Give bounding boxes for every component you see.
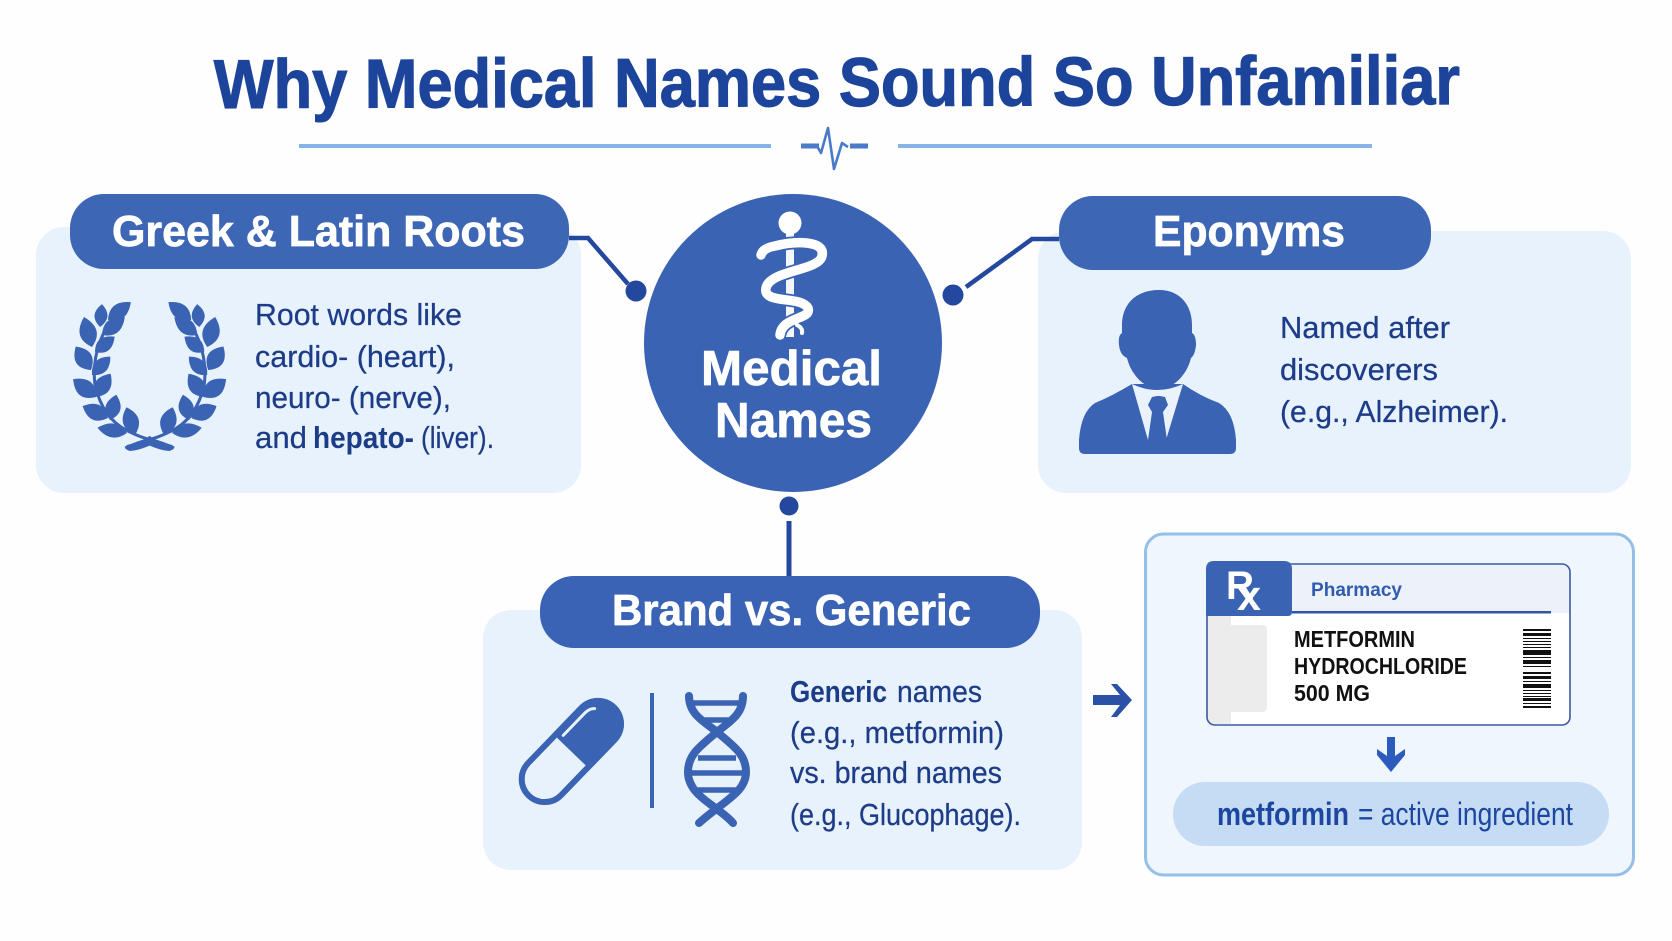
body text: eponyms — [1280, 310, 1508, 429]
body text: eponyms: (e.g., Alzheimer). — [1280, 394, 1508, 429]
pharmacy name: Pharmacy — [1311, 580, 1402, 601]
icon: capsule — [510, 687, 635, 814]
heading pill — [540, 576, 1040, 648]
callout: active ingredient — [1173, 782, 1609, 846]
title divider with heartbeat — [299, 128, 1372, 169]
circle label: Names — [715, 394, 872, 448]
connector: roots to centre — [569, 238, 646, 302]
body text: brand vs generic: Generic — [790, 674, 887, 709]
icon: rod of asclepius — [761, 212, 822, 337]
body text: brand vs generic: vs. brand names — [790, 755, 1002, 790]
panel background — [1038, 231, 1631, 493]
body text: eponyms: discoverers — [1280, 352, 1438, 387]
panel background — [483, 610, 1082, 870]
rx tab: R — [1226, 564, 1254, 608]
barcode — [1523, 629, 1551, 708]
body text: brand vs generic: names — [897, 674, 982, 709]
panel: eponyms — [1038, 196, 1631, 493]
arrow: generic to label — [1093, 684, 1132, 717]
divider between icons — [650, 693, 654, 808]
prescription label — [1206, 561, 1570, 725]
body text: roots — [255, 297, 494, 455]
rx tab — [1206, 561, 1292, 619]
circle label — [701, 342, 882, 448]
panel: pharmacy label example — [1146, 534, 1634, 875]
drug name text — [1294, 626, 1467, 706]
panel background — [1146, 534, 1634, 875]
drug name text: METFORMIN — [1294, 626, 1415, 652]
body text: roots: hepato- — [313, 420, 414, 455]
panel: greek and latin roots — [36, 194, 581, 493]
body text: brand vs generic: (e.g., Glucophage). — [790, 797, 1021, 832]
rx tab: x — [1237, 572, 1262, 619]
icon: person silhouette — [1079, 290, 1236, 454]
heading pill — [70, 194, 569, 269]
body text: brand vs generic: (e.g., metformin) — [790, 715, 1004, 750]
drug name text: HYDROCHLORIDE — [1294, 653, 1467, 679]
connector: centre to brand vs generic — [780, 496, 798, 577]
callout: active ingredient: metformin — [1217, 796, 1349, 832]
heading pill: Eponyms — [1153, 207, 1345, 256]
heading pill: Greek & Latin Roots — [112, 207, 525, 256]
panel background — [36, 227, 581, 493]
icon: dna helix — [688, 696, 746, 823]
body text: roots: and — [255, 420, 307, 455]
drug name text: 500 MG — [1294, 680, 1370, 706]
body text: roots: neuro- (nerve), — [255, 380, 451, 415]
body text: eponyms: Named after — [1280, 310, 1450, 345]
body text: roots: Root words like — [255, 297, 462, 332]
arrow: down to active ingredient — [1377, 737, 1405, 772]
connector: eponyms to centre — [942, 239, 1059, 306]
body text: roots: cardio- (heart), — [255, 339, 455, 374]
icon: laurel wreath — [68, 296, 231, 451]
title: Why Medical Names Sound So Unfamiliar — [214, 42, 1460, 123]
central circle: medical names — [644, 194, 942, 492]
callout: active ingredient: = active ingredient — [1358, 796, 1573, 832]
body text: brand vs generic — [790, 674, 1021, 832]
circle label: Medical — [701, 342, 882, 396]
panel: brand vs generic — [483, 576, 1082, 870]
heading pill — [1059, 196, 1431, 270]
heading pill: Brand vs. Generic — [612, 586, 971, 635]
body text: roots: (liver). — [421, 420, 494, 455]
